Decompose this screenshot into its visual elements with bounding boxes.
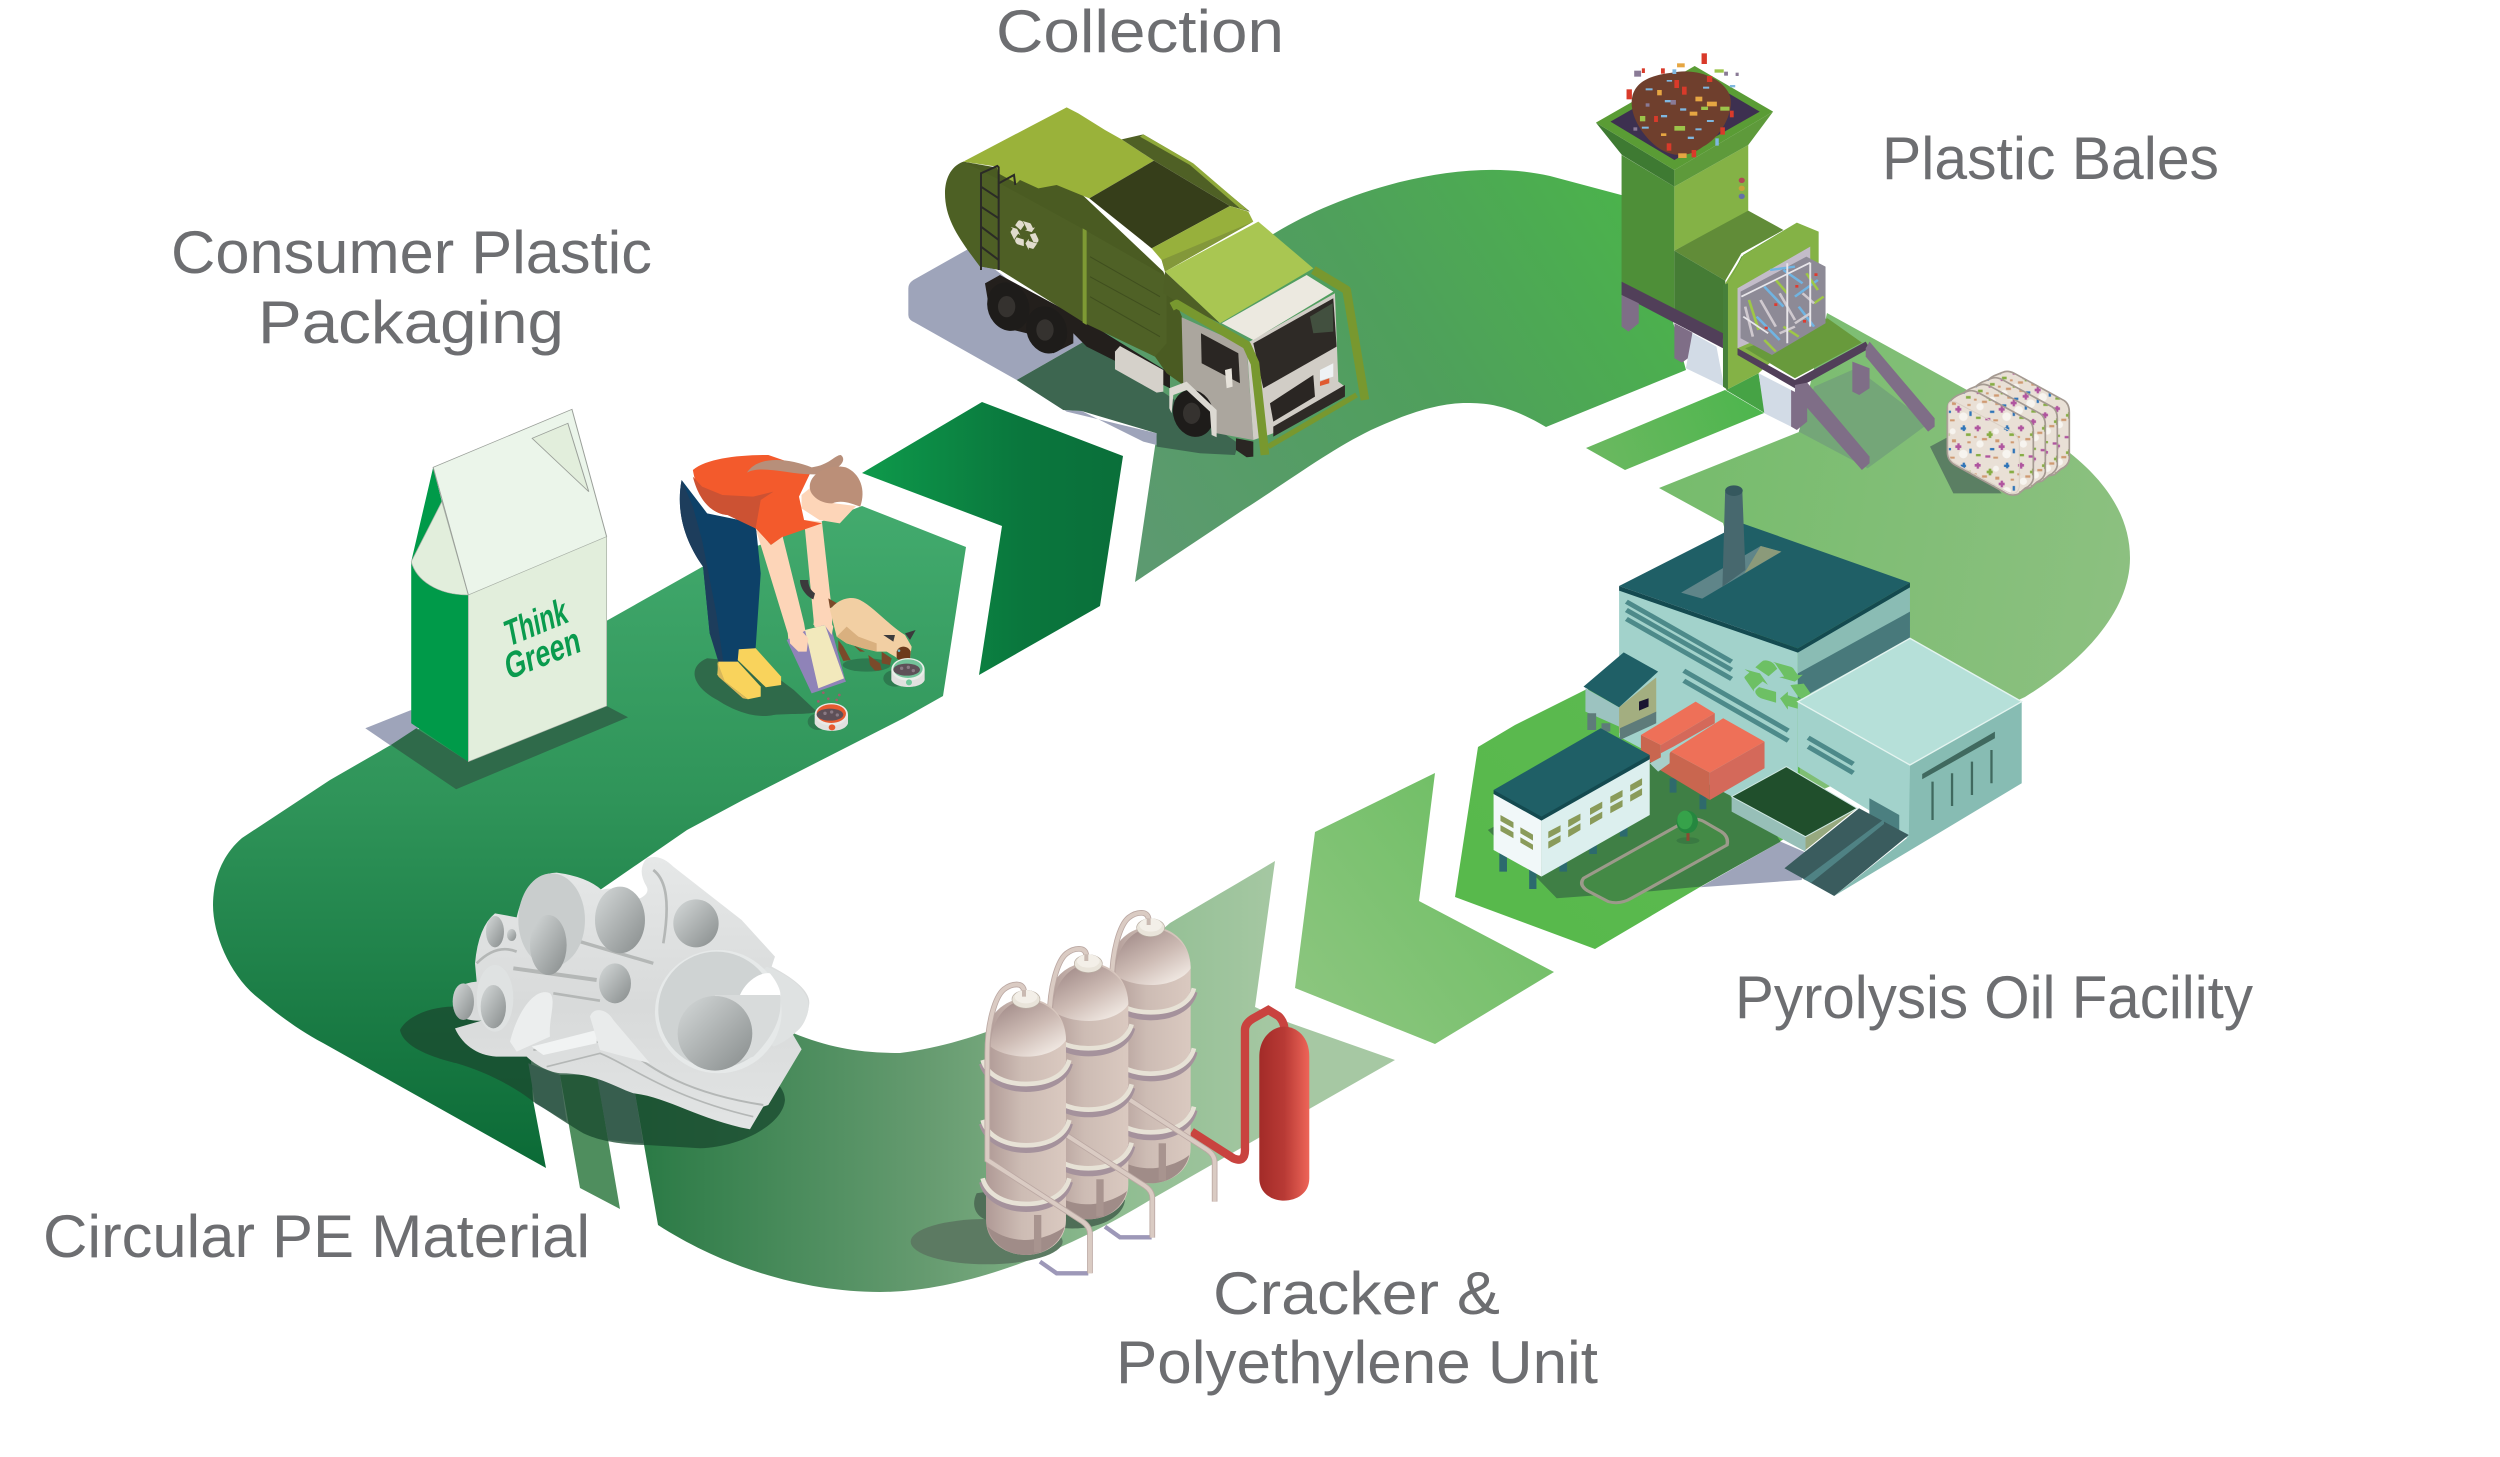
carton text: Think Green [502,590,584,688]
bale shadow [1930,435,2002,493]
group: circular PE material rolls [400,857,809,1148]
lavender ground shadows [528,1063,643,1143]
arrow: light green chevron [1295,773,1554,1044]
hopper [1596,66,1773,187]
ribbon: consumer packaging segment [213,506,966,1168]
side panel front [1083,228,1167,357]
group: plastic bale [1930,371,2069,495]
ribbon: pyrolysis facility segment [1455,640,1800,949]
label: Cracker & Polyethylene Unit: Cracker & [1213,1260,1500,1327]
wall vent stripes [1626,602,1788,741]
boots [717,648,781,699]
label: Collection: Collection [996,0,1284,65]
bale slabs [1947,371,2069,495]
discharge shelf [1738,318,1935,470]
cab side [1182,317,1253,440]
cab front [1236,293,1345,457]
group: pyrolysis oil facility [1488,485,2022,903]
machine base [1674,211,1783,340]
label: Cracker & Polyethylene Unit: Polyethylene Unit [1116,1329,1598,1396]
orange bowl [808,703,848,731]
ribbon: plastic bales segment [1659,313,2130,800]
hopper opening [1089,161,1230,248]
body underlay [963,162,1183,385]
carton text: Think Green: Think [502,590,571,656]
main building roof [1619,523,1910,653]
vessel front [983,984,1090,1273]
group: cracker and polyethylene unit [911,913,1309,1273]
near arm [756,528,809,655]
loading ramp [1784,808,1909,896]
tube shading [477,870,763,1117]
ladder [981,166,1015,270]
food falling [817,691,841,703]
chimney [1722,485,1745,587]
trousers [680,480,761,663]
hands [788,610,833,652]
chassis [985,275,1170,388]
green bowl [883,658,925,687]
large roll [655,950,809,1073]
head and hair [747,455,863,523]
label: Consumer Plastic Packaging: Packaging [258,289,564,356]
white office building [1494,728,1650,889]
far arm [804,520,832,635]
machine supports [1622,282,1791,427]
floor shadows [695,658,817,716]
annex building [1798,638,2022,896]
red pipe [1192,1010,1285,1160]
press opening [1738,247,1810,348]
ribbon: thin band below baler [1586,390,1764,470]
site shadow lavender [1700,842,1807,887]
machine tower [1622,145,1748,310]
carton triangle fold [532,423,589,492]
side panel rear [982,173,1085,323]
hopper far rim [1122,134,1250,212]
carton top panel [433,409,607,595]
visor [1222,275,1333,340]
pipe shadows [1040,1227,1152,1273]
landscaped track [1582,819,1727,903]
label: Consumer Plastic Packaging: Consumer Plastic [171,219,652,286]
cat [800,580,916,672]
recycle symbol: ♻ [1007,209,1042,263]
ramp shadow [1799,368,1929,468]
arrow: dark green chevron [862,402,1123,675]
vessel rear [1107,913,1215,1202]
label: Consumer Plastic Packaging [171,219,652,356]
step box [1115,346,1163,393]
dark shadow [400,1007,785,1148]
top panel [963,107,1154,198]
ribbon: cracker segment [620,861,1395,1292]
label: Pyrolysis Oil Facility: Pyrolysis Oil Facility [1735,964,2253,1031]
tree [1677,811,1699,844]
ribbon: collection segment [1017,170,1686,582]
group: person pouring food [680,455,863,716]
red separator tank [1259,1027,1309,1201]
cab canopy [1165,222,1313,323]
ribbon: thin band under plastic [560,1075,620,1209]
truck shadow [908,249,1238,455]
carton side [411,467,468,762]
rear wheels [980,276,1074,359]
carton gable [411,502,468,595]
waste pile [1627,53,1739,158]
t-shirt [693,455,822,545]
label: Plastic Bales: Plastic Bales [1882,125,2219,192]
orange tanks [1641,702,1765,809]
ground under machine [1726,373,1765,413]
front wheel [1166,382,1220,443]
floor shadows [911,1180,1125,1264]
group: cat, food bag and bowls [787,580,925,731]
carton front panel [468,537,607,762]
curled sheet [510,992,650,1063]
vessel middle [1045,949,1152,1238]
label: Cracker & Polyethylene Unit [1116,1260,1598,1396]
group: garbage truck [908,107,1365,457]
bale front face [1948,402,2019,493]
lifting arms [1172,270,1365,455]
press frame [1723,223,1819,390]
rear lobe [945,162,1000,267]
site ground shadow [1488,747,1781,898]
small house [1584,652,1658,740]
hopper front rim [1152,206,1253,272]
roll mass silhouette [453,857,809,1129]
group: consumer plastic packaging carton [365,409,628,789]
compressed bale in press [1741,257,1826,355]
carton text: Think Green: Green [502,619,584,688]
loading pit [1732,767,1857,852]
main building walls [1619,587,1910,803]
label: Circular PE Material: Circular PE Material [43,1203,590,1270]
group: baler machine [1596,53,1935,470]
recycle symbol on wall: ♻ [1737,637,1819,733]
tube ends [453,873,719,1032]
food bag [787,623,846,693]
carton shadow [365,706,628,789]
